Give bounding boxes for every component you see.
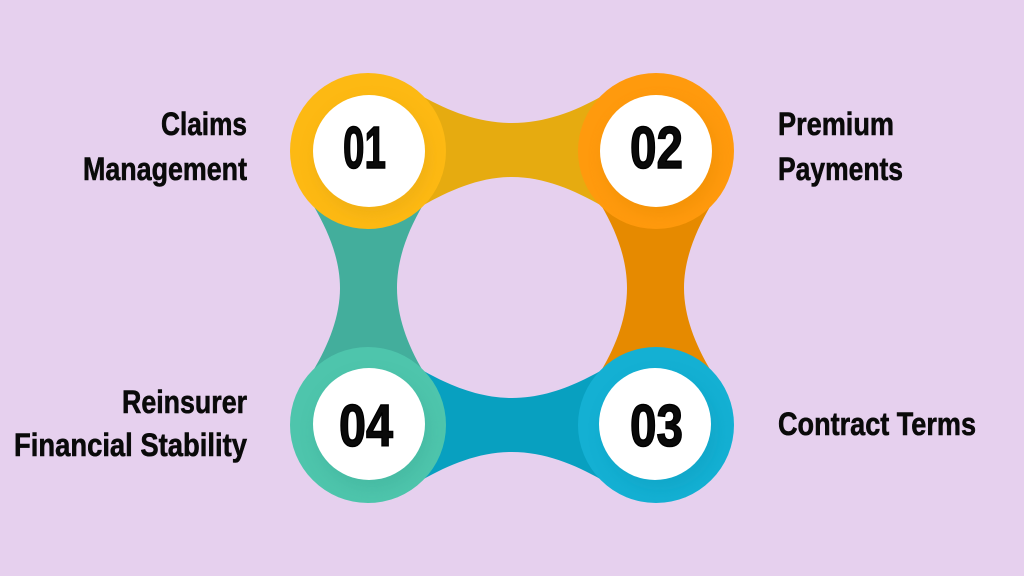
label: Reinsurer Financial Stability: Reinsurer [122,384,247,420]
node 01 [290,73,446,229]
node 04 [290,347,446,503]
number 03: 03 [630,393,683,459]
label: Premium Payments [778,106,903,187]
node 02 [578,73,734,229]
label: Claims Management: Claims [161,106,247,142]
label: Reinsurer Financial Stability [14,384,247,463]
label: Claims Management: Management [83,151,247,187]
label: Claims Management [83,106,247,187]
label: Contract Terms: Contract Terms [778,406,976,442]
label: Premium Payments: Premium [778,106,894,142]
label: Premium Payments: Payments [778,151,903,187]
number 04: 04 [339,393,393,459]
number 02: 02 [630,115,683,181]
number 01: 01 [343,115,386,181]
label: Reinsurer Financial Stability: Financial Stability [14,427,247,463]
connector: left teal band [313,151,423,425]
node 03 [578,347,734,503]
connector: top yellow band [368,96,656,206]
connector: right orange band [601,151,711,425]
connector: bottom blue band [368,370,656,480]
